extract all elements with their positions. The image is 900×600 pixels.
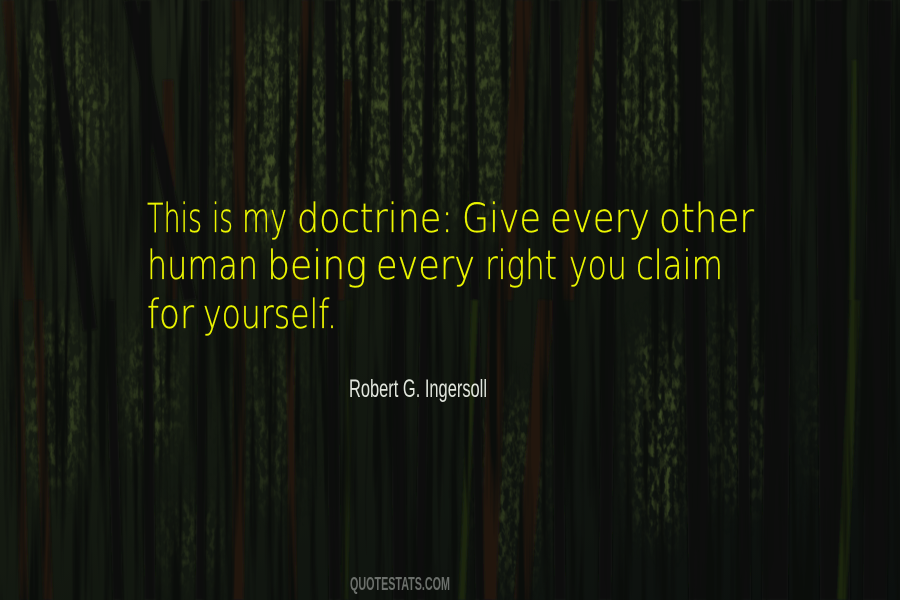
quote line 2: claim (636, 243, 723, 289)
quote line 1: This (147, 196, 202, 242)
quote line 1: every (550, 196, 650, 242)
quote line 1: my (242, 196, 287, 242)
quote line 3: yourself. (203, 292, 337, 338)
quote line 2: you (569, 243, 627, 289)
quote line 3 (147, 292, 337, 338)
quote line 2: human (147, 243, 258, 289)
quote line 2: every (376, 243, 475, 289)
quote line 1: other (659, 196, 754, 242)
footer: site watermark: QUOTESTATS.COM (350, 574, 450, 594)
quote line 1 (147, 196, 754, 242)
quote line 2: being (267, 243, 367, 289)
quote line 2: right (485, 243, 557, 289)
quote text (147, 196, 754, 338)
quote line 1: Give (462, 196, 541, 242)
quote line 2 (147, 243, 723, 289)
author attribution: Robert G. Ingersoll (349, 375, 487, 403)
quote line 1: is (212, 196, 233, 242)
quote line 3: for (147, 292, 194, 338)
quote line 1: doctrine: (297, 196, 453, 242)
